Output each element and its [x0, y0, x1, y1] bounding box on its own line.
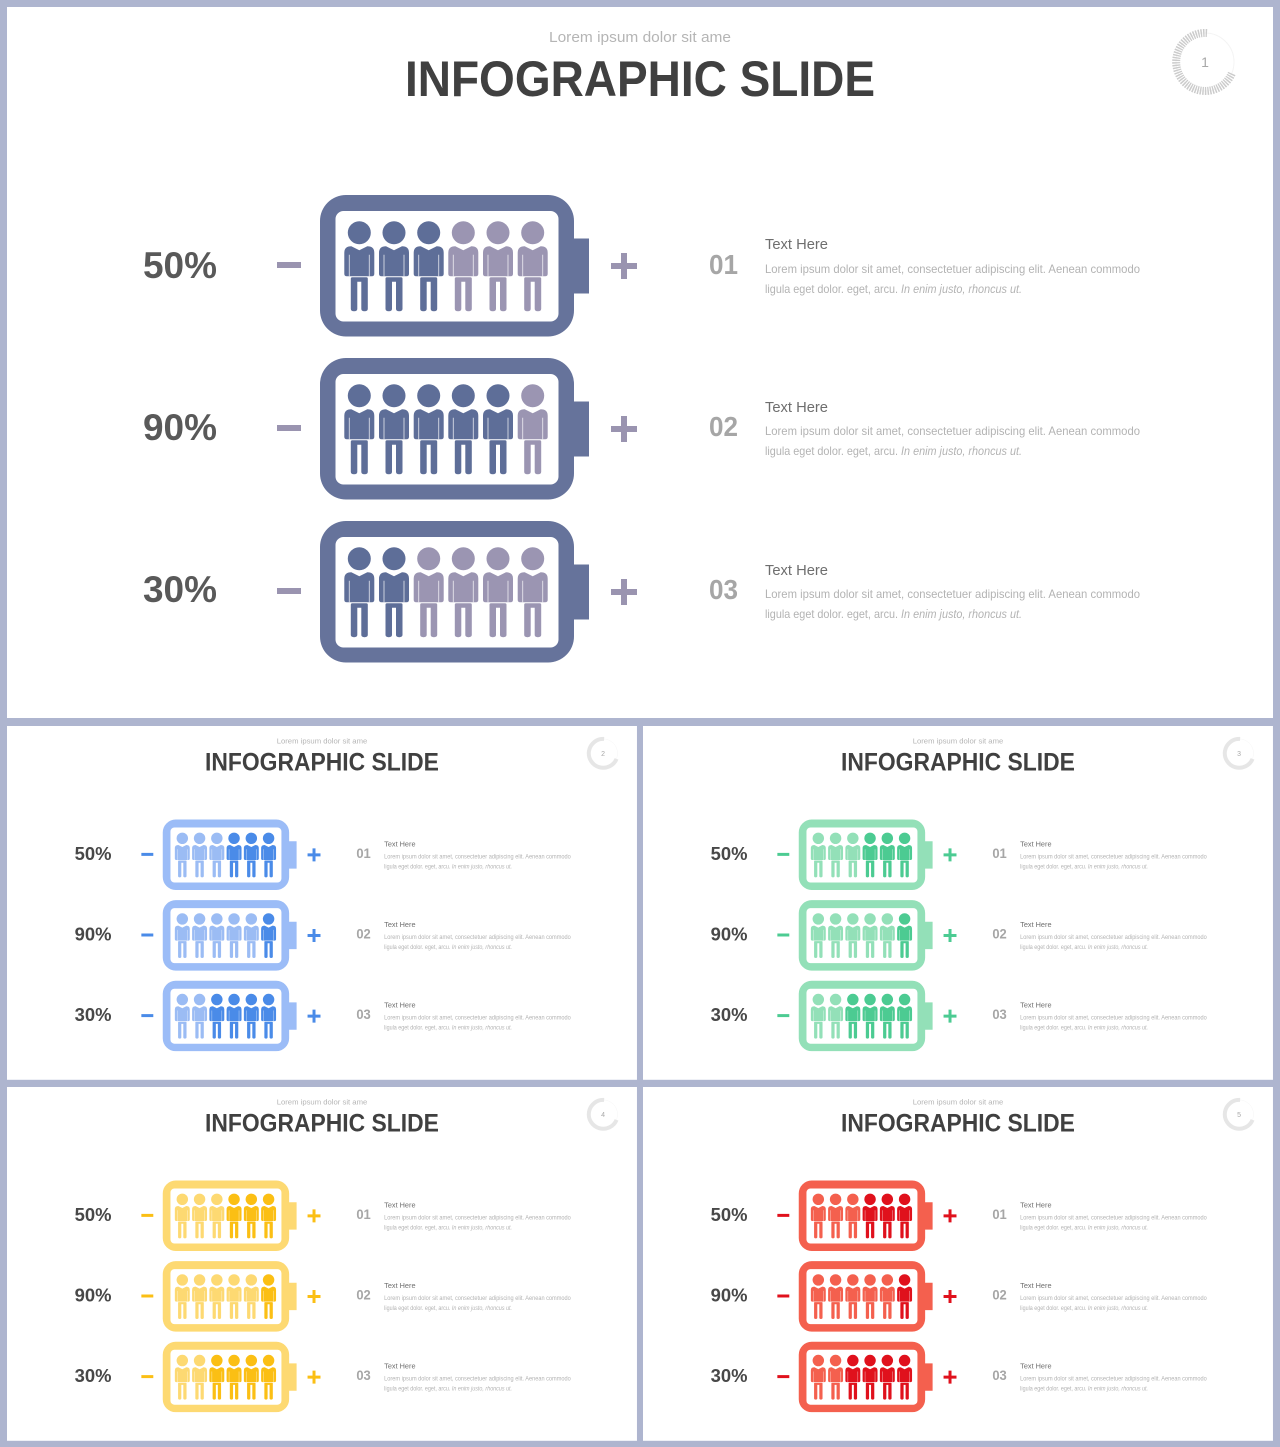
row 3: 30% — [75, 1342, 571, 1412]
percent value: 90% — [143, 407, 217, 448]
item description: ligula eget dolor. eget, arcu. In enim justo, rhoncus ut. — [384, 945, 512, 951]
item description: Lorem ipsum dolor sit amet, consectetuer adipiscing elit. Aenean commodo — [384, 1016, 571, 1022]
item description: ligula eget dolor. eget, arcu. In enim justo, rhoncus ut. — [1020, 1026, 1148, 1032]
item number: 02 — [992, 925, 1007, 941]
row 2: 90% — [143, 358, 1140, 500]
icon: plus — [308, 1290, 320, 1303]
item description: ligula eget dolor. eget, arcu. In enim justo, rhoncus ut. — [765, 282, 1022, 296]
page number badge: 5 — [1237, 1112, 1241, 1119]
icon: minus — [141, 1295, 153, 1297]
percent value: 50% — [711, 1204, 747, 1225]
item heading: Text Here — [384, 1200, 416, 1209]
item number: 01 — [992, 1206, 1007, 1222]
icon: plus — [944, 848, 956, 861]
item heading: Text Here — [1020, 1200, 1052, 1209]
panel: red slide — [643, 1087, 1273, 1441]
icon: plus — [944, 1010, 956, 1023]
item description: ligula eget dolor. eget, arcu. In enim justo, rhoncus ut. — [384, 1306, 512, 1312]
title: INFOGRAPHIC SLIDE — [841, 748, 1075, 776]
panel: yellow slide — [7, 1087, 637, 1441]
item number: 03 — [709, 574, 738, 605]
percent value: 30% — [75, 1004, 111, 1025]
page number badge — [1225, 1100, 1254, 1129]
item description: ligula eget dolor. eget, arcu. In enim justo, rhoncus ut. — [1020, 1387, 1148, 1393]
subtitle: Lorem ipsum dolor sit ame — [277, 736, 367, 745]
item description: Lorem ipsum dolor sit amet, consectetuer adipiscing elit. Aenean commodo — [1020, 1296, 1207, 1302]
item number: 02 — [709, 411, 738, 442]
item description: Lorem ipsum dolor sit amet, consectetuer adipiscing elit. Aenean commodo — [765, 424, 1140, 438]
item heading: Text Here — [1020, 1281, 1052, 1290]
item number: 02 — [356, 925, 371, 941]
item description — [1020, 1215, 1207, 1231]
item number: 01 — [356, 1206, 371, 1222]
slide background — [643, 726, 1273, 1080]
subtitle: Lorem ipsum dolor sit ame — [913, 1097, 1003, 1106]
percent value: 50% — [143, 245, 217, 286]
item description — [384, 1377, 571, 1393]
item description: ligula eget dolor. eget, arcu. In enim justo, rhoncus ut. — [1020, 864, 1148, 870]
item description — [765, 587, 1140, 621]
item description: Lorem ipsum dolor sit amet, consectetuer adipiscing elit. Aenean commodo — [1020, 1215, 1207, 1221]
item heading: Text Here — [384, 920, 416, 929]
item heading: Text Here — [765, 236, 828, 253]
row 2: 90% — [75, 900, 571, 971]
item number: 03 — [992, 1367, 1007, 1383]
icon: minus — [141, 1375, 153, 1378]
battery with people — [163, 981, 297, 1051]
item heading: Text Here — [765, 399, 828, 416]
page number badge — [1176, 33, 1234, 91]
item description — [384, 1215, 571, 1231]
icon: plus — [308, 848, 320, 861]
icon: plus — [611, 579, 637, 605]
row 1: 50% — [75, 820, 571, 890]
icon: minus — [777, 1295, 789, 1297]
row 2: 90% — [75, 1261, 571, 1332]
item description: ligula eget dolor. eget, arcu. In enim justo, rhoncus ut. — [1020, 1225, 1148, 1231]
title: INFOGRAPHIC SLIDE — [205, 1109, 439, 1137]
item number: 01 — [709, 249, 738, 280]
item description — [1020, 1377, 1207, 1393]
battery with people — [799, 1342, 933, 1412]
percent value: 90% — [75, 1284, 111, 1305]
title: INFOGRAPHIC SLIDE — [405, 51, 875, 107]
slide background — [643, 1087, 1273, 1441]
page number badge: 3 — [1237, 751, 1241, 758]
item heading: Text Here — [1020, 920, 1052, 929]
item heading: Text Here — [384, 1001, 416, 1010]
row 3: 30% — [75, 981, 571, 1051]
item description: Lorem ipsum dolor sit amet, consectetuer adipiscing elit. Aenean commodo — [1020, 854, 1207, 860]
battery with people — [163, 1181, 297, 1251]
percent value: 90% — [711, 923, 747, 944]
icon: plus — [944, 929, 956, 942]
item description: ligula eget dolor. eget, arcu. In enim justo, rhoncus ut. — [384, 864, 512, 870]
icon: plus — [611, 416, 637, 442]
item description: ligula eget dolor. eget, arcu. In enim justo, rhoncus ut. — [384, 1026, 512, 1032]
item heading: Text Here — [1020, 1001, 1052, 1010]
row 3: 30% — [711, 1342, 1207, 1412]
subtitle: Lorem ipsum dolor sit ame — [913, 736, 1003, 745]
icon: plus — [308, 929, 320, 942]
slide background — [7, 7, 1273, 718]
item description — [384, 1296, 571, 1312]
battery with people — [163, 900, 297, 971]
icon: minus — [141, 1214, 153, 1217]
item description: Lorem ipsum dolor sit amet, consectetuer adipiscing elit. Aenean commodo — [1020, 1016, 1207, 1022]
item description: Lorem ipsum dolor sit amet, consectetuer adipiscing elit. Aenean commodo — [384, 1377, 571, 1383]
icon: plus — [944, 1371, 956, 1384]
item number: 02 — [992, 1286, 1007, 1302]
battery with people — [163, 1261, 297, 1332]
item description: Lorem ipsum dolor sit amet, consectetuer adipiscing elit. Aenean commodo — [384, 1215, 571, 1221]
item description — [765, 262, 1140, 296]
item heading: Text Here — [1020, 839, 1052, 848]
item description — [384, 854, 571, 870]
item description: Lorem ipsum dolor sit amet, consectetuer adipiscing elit. Aenean commodo — [384, 1296, 571, 1302]
percent value: 90% — [75, 923, 111, 944]
icon: minus — [277, 588, 301, 594]
icon: plus — [944, 1209, 956, 1222]
row 1: 50% — [711, 1181, 1207, 1251]
row 1: 50% — [143, 195, 1140, 336]
item heading: Text Here — [1020, 1362, 1052, 1371]
item description — [384, 935, 571, 951]
page number badge: 1 — [1201, 54, 1209, 70]
item heading: Text Here — [384, 1362, 416, 1371]
icon: minus — [141, 1014, 153, 1017]
slide background — [7, 1087, 637, 1441]
battery with people — [320, 358, 589, 500]
item description: Lorem ipsum dolor sit amet, consectetuer adipiscing elit. Aenean commodo — [384, 935, 571, 941]
page number badge — [1225, 739, 1254, 768]
battery with people — [799, 900, 933, 971]
item number: 03 — [992, 1006, 1007, 1022]
item description — [1020, 935, 1207, 951]
icon: plus — [944, 1290, 956, 1303]
item description: Lorem ipsum dolor sit amet, consectetuer adipiscing elit. Aenean commodo — [765, 262, 1140, 276]
item description — [1020, 854, 1207, 870]
item description: ligula eget dolor. eget, arcu. In enim justo, rhoncus ut. — [1020, 945, 1148, 951]
battery with people — [320, 195, 589, 336]
icon: plus — [308, 1209, 320, 1222]
battery with people — [163, 820, 297, 890]
item description: ligula eget dolor. eget, arcu. In enim justo, rhoncus ut. — [384, 1387, 512, 1393]
item heading: Text Here — [384, 1281, 416, 1290]
icon: minus — [141, 934, 153, 936]
icon: minus — [777, 1014, 789, 1017]
icon: plus — [308, 1010, 320, 1023]
percent value: 90% — [711, 1284, 747, 1305]
row 2: 90% — [711, 1261, 1207, 1332]
row 3: 30% — [143, 521, 1140, 662]
icon: minus — [277, 425, 301, 431]
subtitle: Lorem ipsum dolor sit ame — [549, 29, 731, 46]
row 1: 50% — [711, 820, 1207, 890]
icon: minus — [141, 853, 153, 856]
item number: 03 — [356, 1006, 371, 1022]
row 2: 90% — [711, 900, 1207, 971]
item description: Lorem ipsum dolor sit amet, consectetuer adipiscing elit. Aenean commodo — [1020, 935, 1207, 941]
item description: Lorem ipsum dolor sit amet, consectetuer adipiscing elit. Aenean commodo — [765, 587, 1140, 601]
item description: ligula eget dolor. eget, arcu. In enim justo, rhoncus ut. — [765, 444, 1022, 458]
percent value: 30% — [711, 1365, 747, 1386]
item description — [1020, 1296, 1207, 1312]
battery with people — [799, 1181, 933, 1251]
icon: minus — [277, 262, 301, 268]
page number badge — [589, 1100, 618, 1129]
panel: main slide — [7, 7, 1273, 718]
subtitle: Lorem ipsum dolor sit ame — [277, 1097, 367, 1106]
item description — [384, 1016, 571, 1032]
title: INFOGRAPHIC SLIDE — [205, 748, 439, 776]
page number badge: 4 — [601, 1112, 605, 1119]
page number badge: 2 — [601, 751, 605, 758]
item description: Lorem ipsum dolor sit amet, consectetuer adipiscing elit. Aenean commodo — [384, 854, 571, 860]
item description — [765, 424, 1140, 458]
percent value: 30% — [143, 569, 217, 610]
battery with people — [163, 1342, 297, 1412]
battery with people — [799, 981, 933, 1051]
percent value: 30% — [711, 1004, 747, 1025]
item heading: Text Here — [765, 562, 828, 579]
icon: plus — [308, 1371, 320, 1384]
item description: ligula eget dolor. eget, arcu. In enim justo, rhoncus ut. — [384, 1225, 512, 1231]
battery with people — [799, 820, 933, 890]
battery with people — [799, 1261, 933, 1332]
icon: minus — [777, 1214, 789, 1217]
battery with people — [320, 521, 589, 662]
item number: 01 — [992, 845, 1007, 861]
panel: blue slide — [7, 726, 637, 1080]
percent value: 50% — [711, 843, 747, 864]
icon: minus — [777, 1375, 789, 1378]
slide background — [7, 726, 637, 1080]
item description: Lorem ipsum dolor sit amet, consectetuer adipiscing elit. Aenean commodo — [1020, 1377, 1207, 1383]
page number badge — [589, 739, 618, 768]
row 3: 30% — [711, 981, 1207, 1051]
icon: plus — [611, 253, 637, 279]
item description: ligula eget dolor. eget, arcu. In enim justo, rhoncus ut. — [765, 607, 1022, 621]
item number: 02 — [356, 1286, 371, 1302]
item number: 01 — [356, 845, 371, 861]
icon: minus — [777, 853, 789, 856]
title: INFOGRAPHIC SLIDE — [841, 1109, 1075, 1137]
item heading: Text Here — [384, 839, 416, 848]
item description: ligula eget dolor. eget, arcu. In enim justo, rhoncus ut. — [1020, 1306, 1148, 1312]
panel: green slide — [643, 726, 1273, 1080]
icon: minus — [777, 934, 789, 936]
item number: 03 — [356, 1367, 371, 1383]
item description — [1020, 1016, 1207, 1032]
row 1: 50% — [75, 1181, 571, 1251]
percent value: 30% — [75, 1365, 111, 1386]
percent value: 50% — [75, 1204, 111, 1225]
percent value: 50% — [75, 843, 111, 864]
